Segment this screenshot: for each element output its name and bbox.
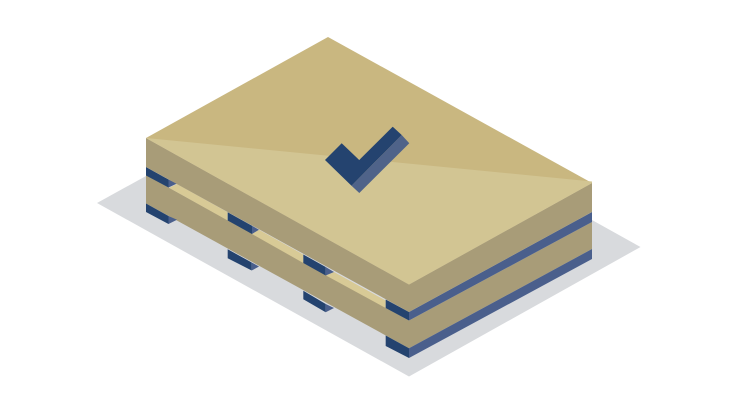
upper board: right side: [409, 183, 592, 312]
lower blue blocks: [146, 204, 409, 358]
cream gaps between boards: [169, 184, 386, 308]
top face light area: [146, 138, 592, 284]
checkmark side: [352, 135, 409, 193]
top face: [146, 37, 592, 284]
lower board: left side: [146, 175, 409, 348]
floor shadow: [97, 176, 640, 376]
lower board: right side: [409, 222, 592, 348]
upper right blue runner: [409, 212, 592, 320]
icon: checkmark: [325, 127, 409, 193]
upper blue blocks: [146, 167, 409, 320]
checkmark front: [325, 127, 402, 186]
pallet: [146, 37, 592, 358]
lower right blue runner: [409, 249, 592, 358]
upper board: left side: [146, 138, 409, 312]
